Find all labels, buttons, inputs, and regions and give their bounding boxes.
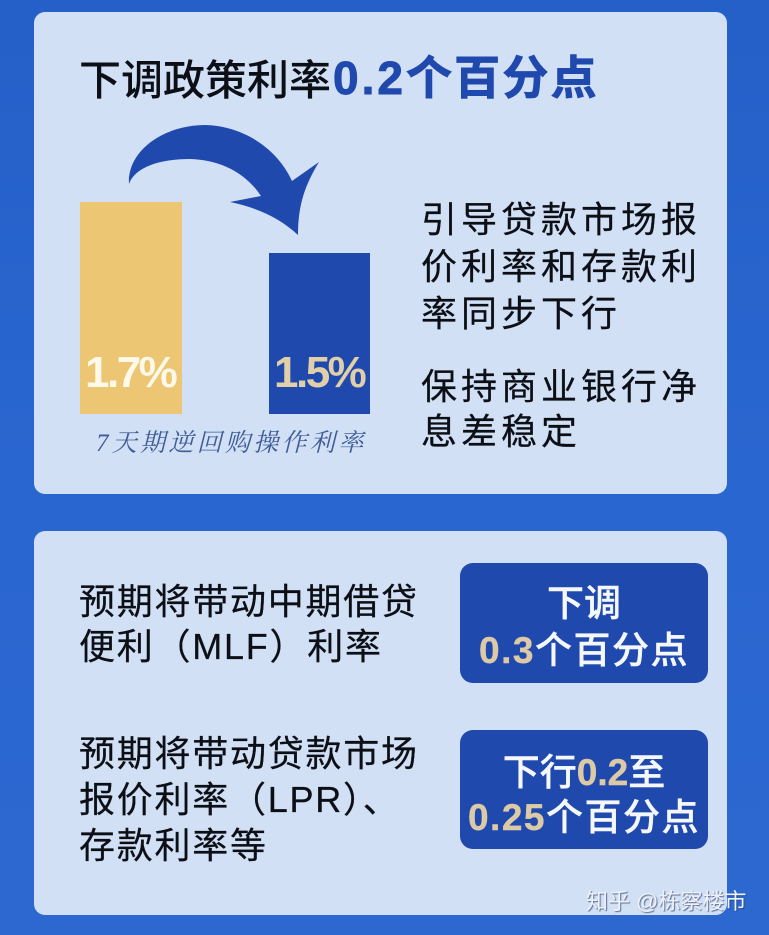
box: down 0.2 to 0.25 points [460, 730, 708, 849]
text: guide LPR and deposit rates: 率同步下行 [421, 293, 621, 334]
text: keep net interest margin stable [421, 366, 701, 452]
box: down 0.2 to 0.25 points: 0.25个百分点 [468, 797, 700, 838]
text: MLF expectation: 便利（MLF）利率 [79, 626, 383, 667]
text: MLF expectation [79, 581, 419, 667]
panel: expected effects [34, 531, 727, 915]
text: guide LPR and deposit rates: 引导贷款市场报 [421, 199, 701, 240]
text: LPR expectation: 预期将带动贷款市场 [79, 733, 419, 774]
text: LPR expectation: 报价利率（LPR）、 [79, 779, 401, 820]
chart caption: 7天期逆回购操作利率 [96, 430, 367, 457]
text: keep net interest margin stable: 保持商业银行净 [421, 366, 701, 407]
box: down 0.3 points [460, 563, 708, 683]
text: MLF expectation: 预期将带动中期借贷 [79, 581, 419, 622]
bar: 1.5% [269, 253, 370, 414]
bar: 1.7% [80, 202, 182, 414]
bar label: 1.5%: 1.5% [274, 348, 364, 397]
box: down 0.3 points: 下调 [547, 583, 621, 624]
bar label: 1.7%: 1.7% [85, 348, 175, 397]
panel: policy rate cut [34, 12, 727, 494]
text: guide LPR and deposit rates: 价利率和存款利 [421, 246, 701, 287]
box: down 0.3 points: 0.3个百分点 [479, 630, 689, 671]
text: LPR expectation: 存款利率等 [79, 825, 268, 866]
text: keep net interest margin stable: 息差稳定 [421, 411, 581, 452]
text: guide LPR and deposit rates [421, 199, 701, 334]
icon: curved arrow [128, 125, 319, 235]
title: 下调政策利率0.2个百分点 [79, 52, 599, 104]
watermark: 知乎 @栋察楼市 [586, 889, 746, 914]
text: LPR expectation [79, 733, 419, 866]
box: down 0.2 to 0.25 points: 下行0.2至 [503, 752, 665, 793]
